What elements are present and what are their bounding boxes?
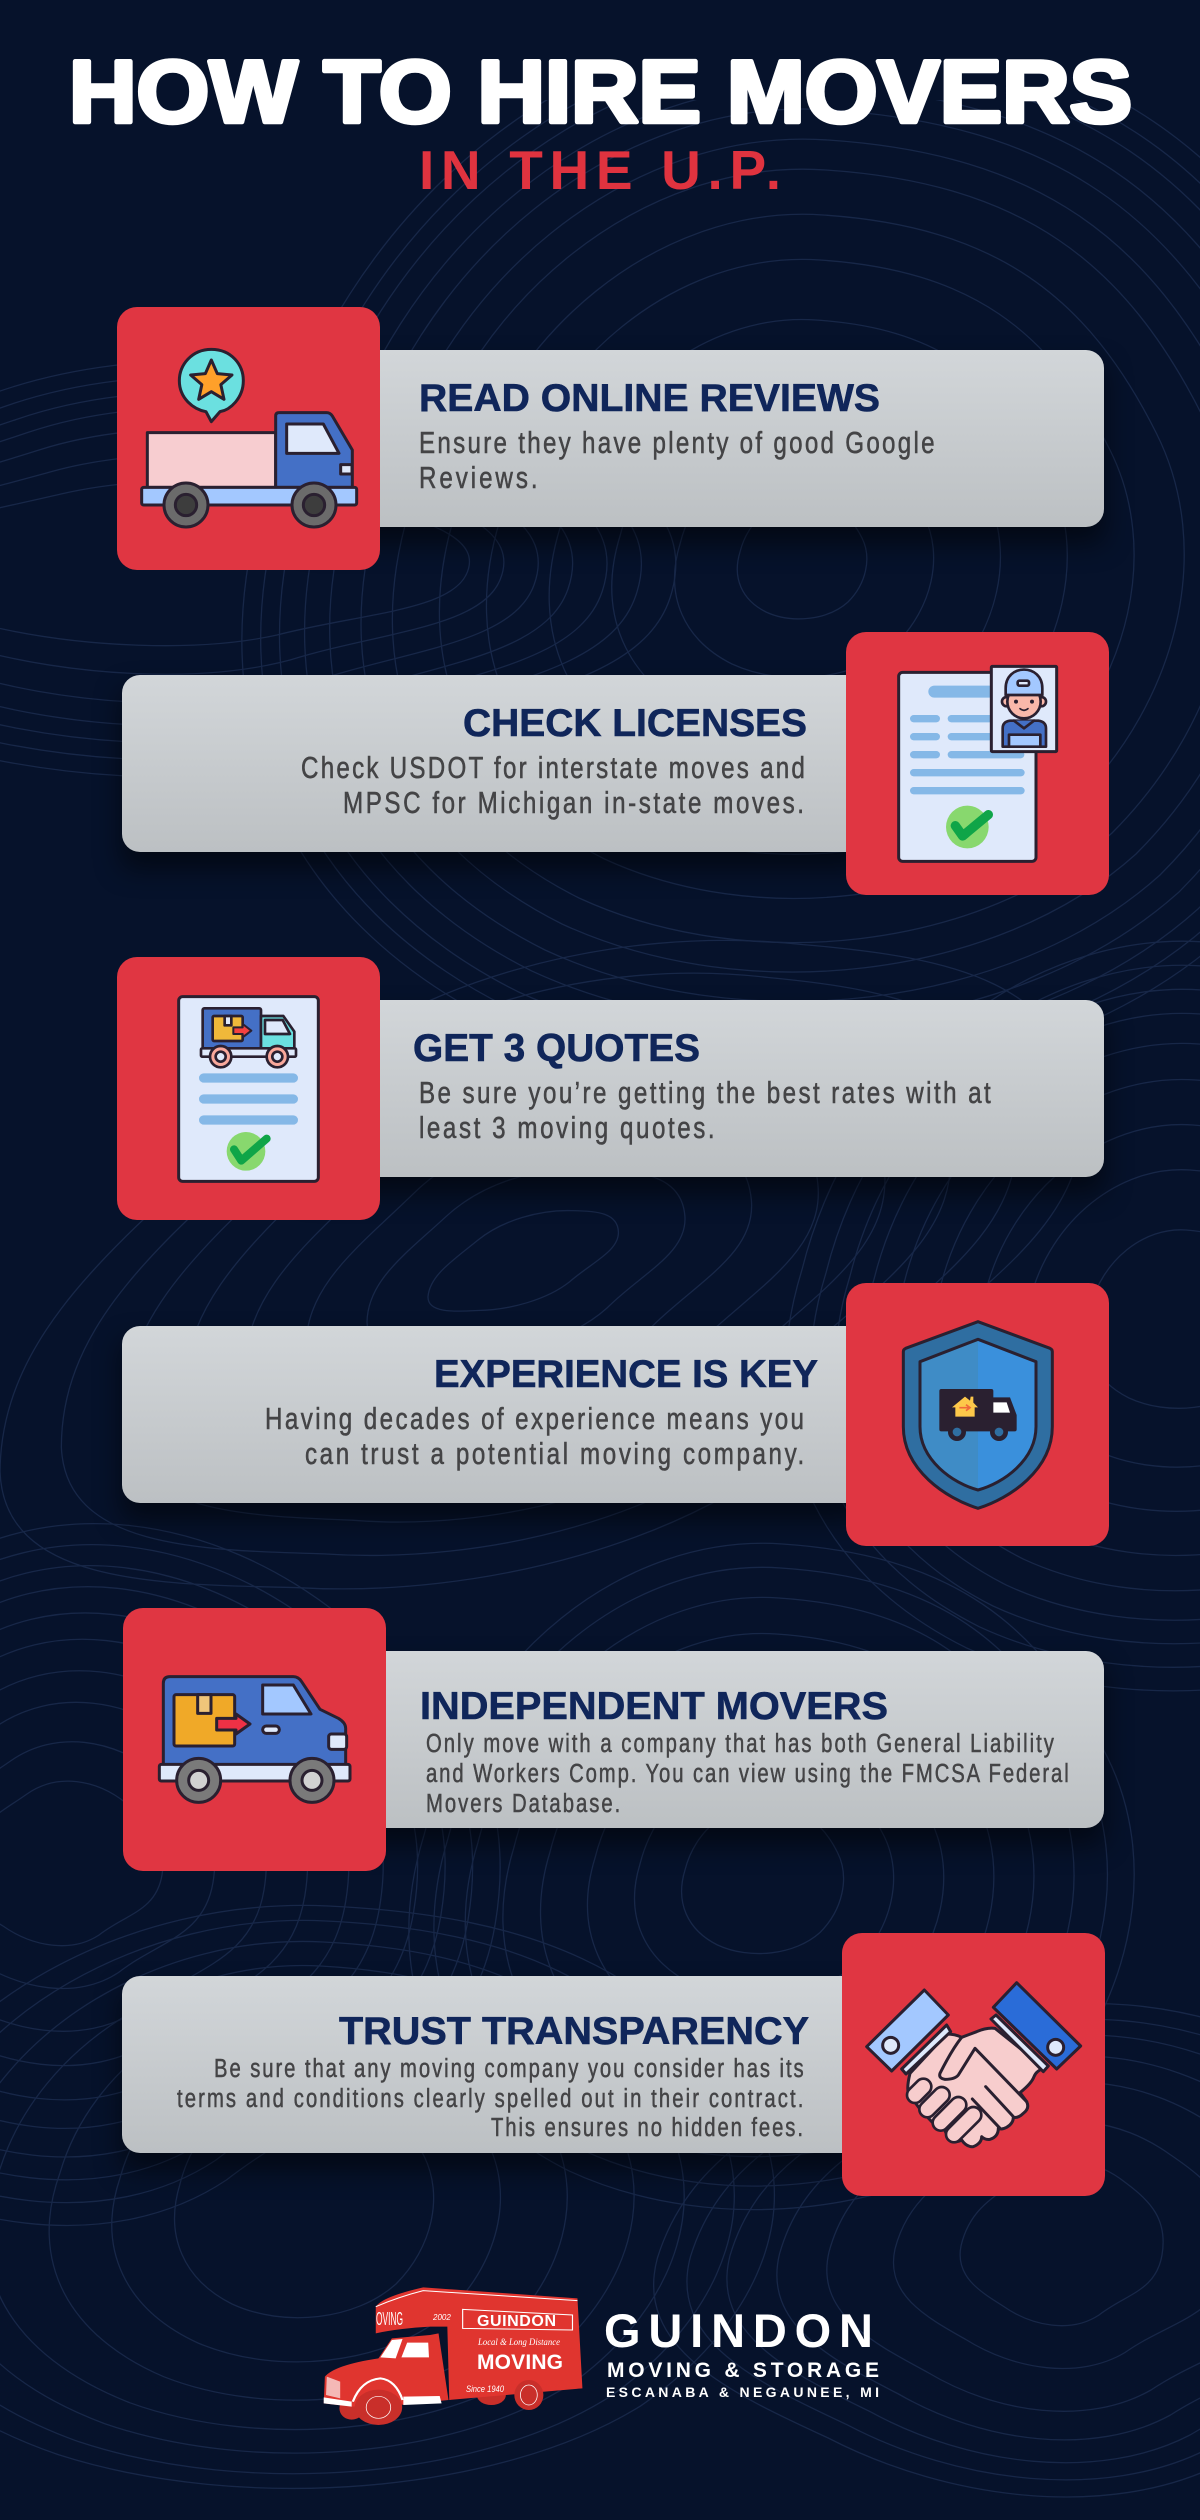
heading: get 3 quotes: GET 3 QUOTES bbox=[413, 1027, 700, 1070]
icon: handshake bbox=[842, 1933, 1105, 2196]
logo: moving truck illustration: 2002 bbox=[432, 2313, 451, 2322]
text: trust transparency: terms and conditions clearly spelled out in their contract. bbox=[177, 2084, 803, 2113]
heading: check licenses: CHECK LICENSES bbox=[463, 702, 807, 745]
icon: quote document with truck bbox=[117, 957, 380, 1220]
text: experience is key: Having decades of experience means you bbox=[265, 1401, 804, 1436]
logo: moving truck illustration: GUINDON bbox=[477, 2313, 556, 2330]
heading: experience is key: EXPERIENCE IS KEY bbox=[434, 1353, 818, 1396]
logo: company name: GUINDON bbox=[604, 2304, 873, 2357]
text: read online reviews bbox=[419, 425, 935, 495]
panel: read online reviews bbox=[117, 307, 1104, 570]
text: independent movers bbox=[426, 1729, 1069, 1818]
text: read online reviews: Ensure they have plenty of good Google bbox=[419, 425, 935, 460]
logo: moving truck illustration: OVING bbox=[376, 2309, 403, 2329]
icon: licence document with mover bbox=[846, 632, 1109, 895]
logo: company name: ESCANABA & NEGAUNEE, MI bbox=[606, 2384, 879, 2400]
text: get 3 quotes bbox=[419, 1075, 991, 1145]
text: read online reviews: Reviews. bbox=[419, 460, 538, 495]
logo: moving truck illustration: Local & Long Distance bbox=[477, 2337, 560, 2347]
icon: moving van bbox=[123, 1608, 386, 1871]
text: get 3 quotes: least 3 moving quotes. bbox=[419, 1110, 715, 1145]
logo: company name bbox=[604, 2304, 879, 2400]
heading: trust transparency: TRUST TRANSPARENCY bbox=[339, 2010, 809, 2053]
text: check licenses bbox=[301, 750, 805, 820]
panel: independent movers bbox=[123, 1608, 1104, 1871]
panel: check licenses bbox=[122, 632, 1109, 895]
heading: independent movers: INDEPENDENT MOVERS bbox=[420, 1685, 888, 1728]
logo: moving truck illustration: Since 1940 bbox=[466, 2384, 504, 2394]
text: experience is key: can trust a potential moving company. bbox=[305, 1436, 804, 1471]
text: independent movers: Only move with a company that has both General Liability bbox=[426, 1729, 1054, 1758]
logo: company name: MOVING & STORAGE bbox=[607, 2359, 879, 2382]
text: independent movers: and Workers Comp. You can view using the FMCSA Federal bbox=[426, 1759, 1069, 1788]
text: experience is key bbox=[265, 1401, 804, 1471]
text: check licenses: Check USDOT for interstate moves and bbox=[301, 750, 805, 785]
icon: truck with star bbox=[117, 307, 380, 570]
title bbox=[69, 42, 1132, 201]
heading: read online reviews: READ ONLINE REVIEWS bbox=[419, 377, 880, 420]
text: independent movers: Movers Database. bbox=[426, 1789, 620, 1818]
panel: experience is key bbox=[122, 1283, 1109, 1546]
logo: moving truck illustration: MOVING bbox=[477, 2351, 563, 2374]
text: trust transparency: This ensures no hidden fees. bbox=[491, 2113, 803, 2142]
title: IN THE U.P. bbox=[419, 139, 781, 201]
text: trust transparency: Be sure that any moving company you consider has its bbox=[214, 2054, 804, 2083]
text: trust transparency bbox=[177, 2054, 804, 2142]
icon: shield with truck bbox=[846, 1283, 1109, 1546]
panel: trust transparency bbox=[122, 1933, 1105, 2196]
panel: get 3 quotes bbox=[117, 957, 1104, 1220]
title: HOW TO HIRE MOVERS bbox=[69, 42, 1132, 141]
logo: moving truck illustration bbox=[324, 2287, 582, 2425]
text: get 3 quotes: Be sure you’re getting the best rates with at bbox=[419, 1075, 991, 1110]
text: check licenses: MPSC for Michigan in-state moves. bbox=[343, 785, 804, 820]
